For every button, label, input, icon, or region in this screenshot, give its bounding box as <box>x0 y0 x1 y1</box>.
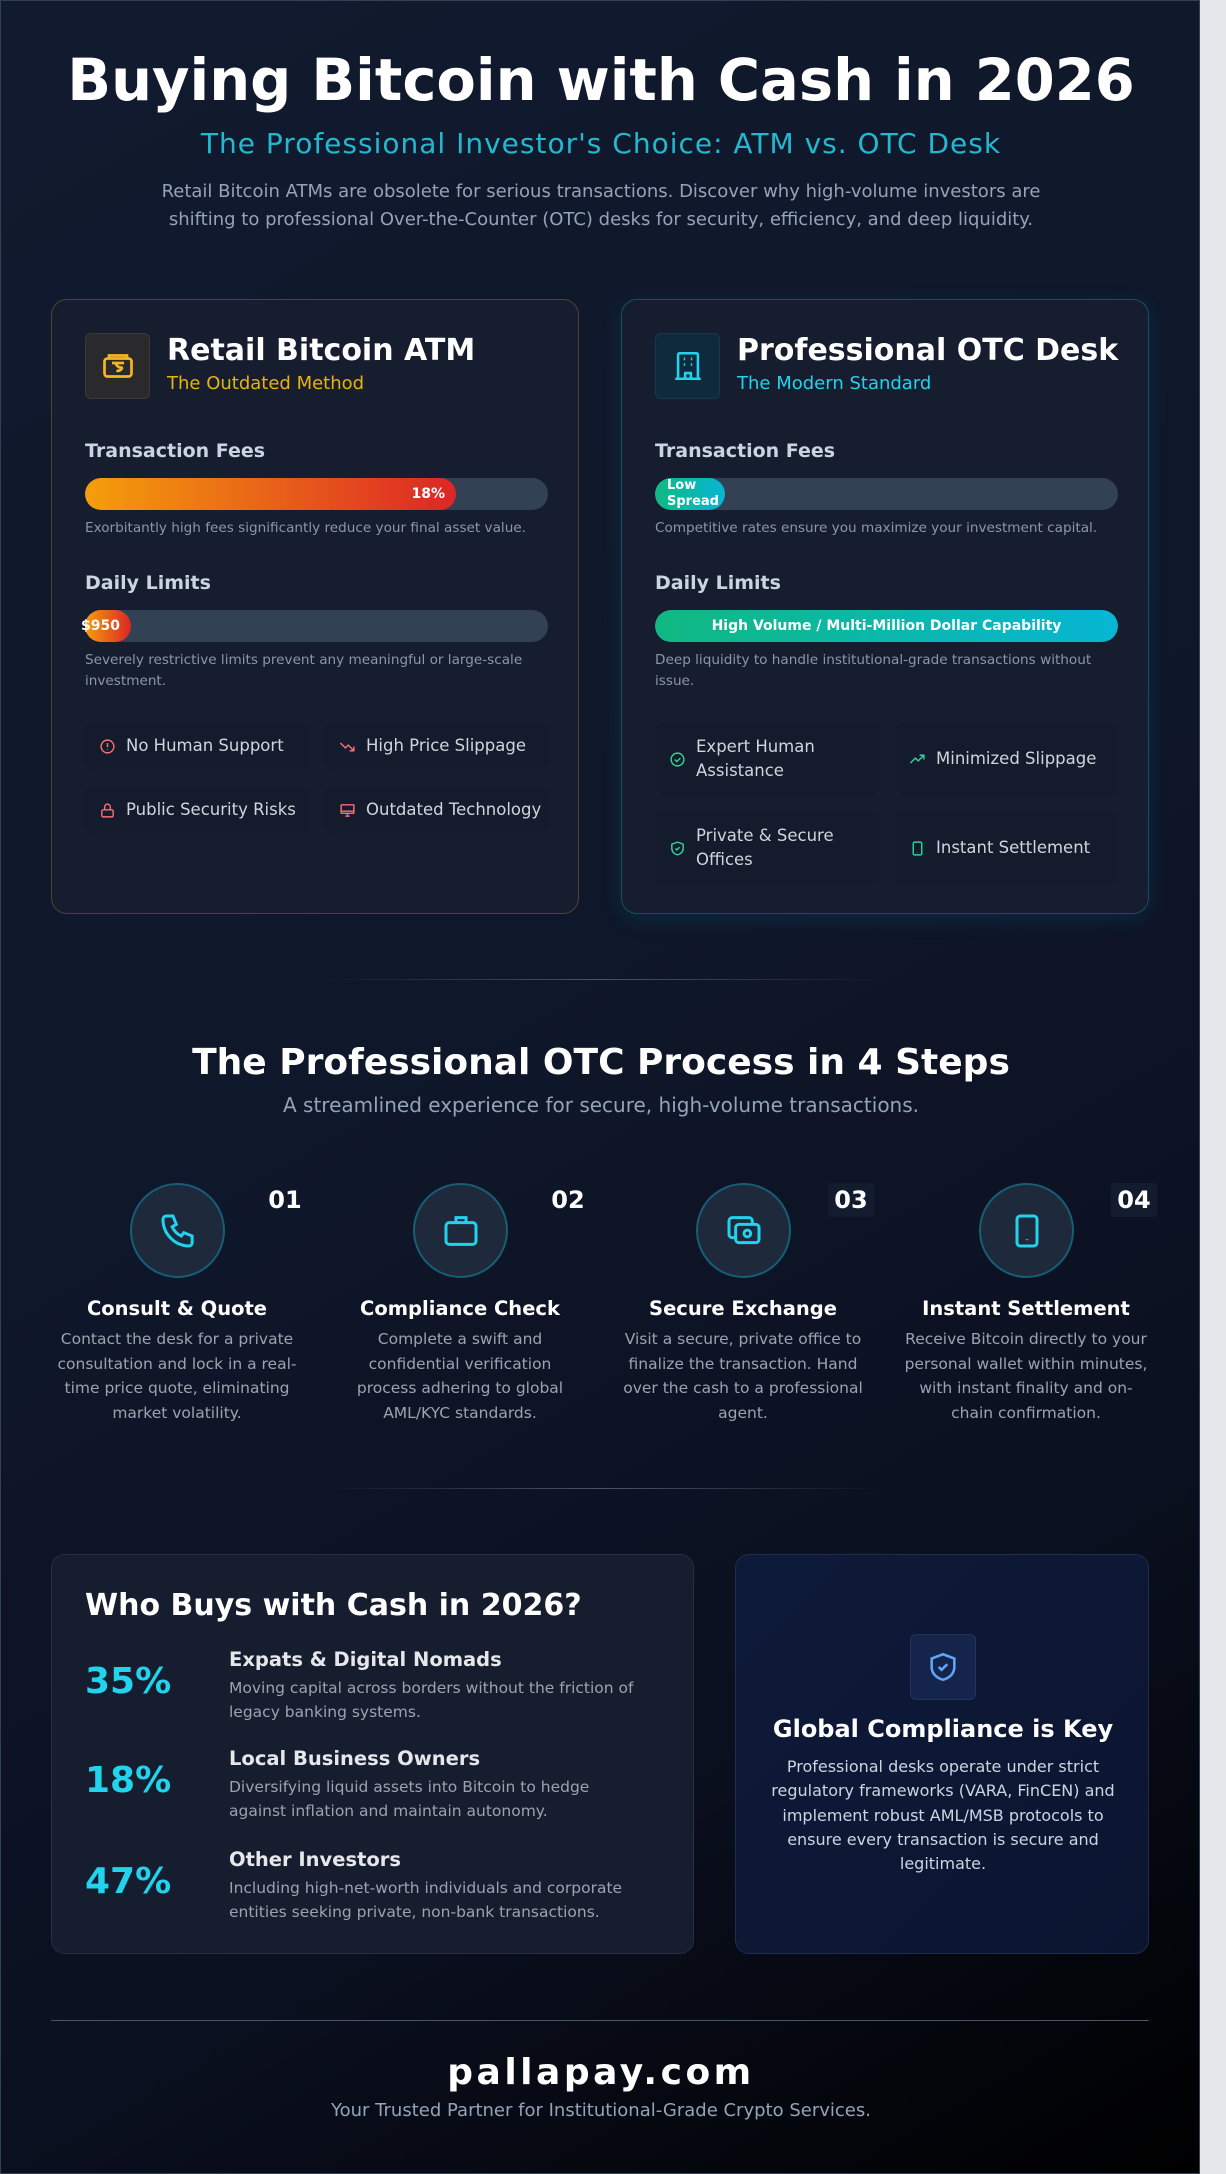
heading: Who Buys with Cash in 2026? <box>85 1588 582 1623</box>
text: Consult & Quote <box>87 1297 267 1320</box>
feature: settlement <box>895 812 1118 884</box>
step 3 <box>623 1183 874 1422</box>
heading: Retail Bitcoin ATM <box>167 333 475 368</box>
heading: Professional OTC Desk <box>737 333 1118 368</box>
feature: slippage: Minimized Slippage <box>936 749 1096 768</box>
feature: no human support: No Human Support <box>126 736 284 755</box>
stat: expats: Expats & Digital Nomads <box>229 1648 502 1671</box>
bar: limits $950: $950 <box>81 618 120 634</box>
text: 01 <box>268 1186 302 1214</box>
icon: shield <box>910 1634 976 1700</box>
feature: technology <box>325 787 548 833</box>
bar: low spread: Low <box>667 478 696 493</box>
text: 03 <box>834 1186 868 1214</box>
panel: retail ATM: Exorbitantly high fees significantly reduce your final asset value. <box>85 520 526 536</box>
stat: expats: 35% <box>85 1661 171 1702</box>
feature: private offices: Private & Secure <box>696 826 834 845</box>
text: Visit a secure, private office to finalize the transaction. Hand over the cash to a professional agent. <box>623 1330 863 1422</box>
subtitle: The Professional Investor's Choice: ATM vs. OTC Desk <box>201 127 1001 160</box>
text: Instant Settlement <box>922 1297 1130 1320</box>
feature: private offices: Offices <box>696 850 753 869</box>
feature: expert <box>655 723 880 795</box>
stat: business owners: 18% <box>85 1760 171 1801</box>
feature: slippage <box>325 723 548 769</box>
label: limits: Daily Limits <box>655 572 781 594</box>
icon: cash <box>696 1183 791 1278</box>
label: fees: Transaction Fees <box>655 440 835 462</box>
stat: other investors: Including high-net-worth individuals and corporate entities seeking private, non-bank transactions. <box>229 1879 622 1921</box>
icon: phone <box>130 1183 225 1278</box>
bar: high volume: High Volume / Multi-Million Dollar Capability <box>712 618 1061 634</box>
stat: other investors: 47% <box>85 1861 171 1902</box>
stat: business owners <box>85 1747 589 1820</box>
stat: business owners: Diversifying liquid assets into Bitcoin to hedge against inflation and maintain autonomy. <box>229 1778 589 1820</box>
step 2 <box>357 1183 585 1422</box>
intro text: Retail Bitcoin ATMs are obsolete for serious transactions. Discover why high-volume investors are shifting to professional Over-the-Counter (OTC) desks for security, efficiency, and deep liquidity. <box>162 181 1040 230</box>
panel: retail ATM: Severely restrictive limits prevent any meaningful or large-scale investment. <box>85 652 522 689</box>
icon: building <box>655 333 720 399</box>
text: Complete a swift and confidential verification process adhering to global AML/KYC standards. <box>357 1330 563 1422</box>
panel: retail ATM: The Outdated Method <box>167 373 364 394</box>
feature: security <box>85 787 310 833</box>
label: fees: Transaction Fees <box>85 440 265 462</box>
text: 04 <box>1117 1186 1151 1214</box>
panel: who buys <box>51 1554 694 1954</box>
bar: low spread <box>655 478 1118 510</box>
panel: OTC desk: Deep liquidity to handle institutional-grade transactions without issue. <box>655 652 1091 689</box>
text: Receive Bitcoin directly to your personal wallet within minutes, with instant finality and on-chain confirmation. <box>905 1330 1147 1422</box>
footer brand: pallapay.com <box>447 2052 755 2093</box>
text: Contact the desk for a private consultation and lock in a real-time price quote, eliminating market volatility. <box>58 1330 296 1422</box>
text: Secure Exchange <box>649 1297 837 1320</box>
text: Compliance Check <box>360 1297 560 1320</box>
title: Buying Bitcoin with Cash in 2026 <box>67 47 1135 114</box>
panel: OTC desk: Competitive rates ensure you maximize your investment capital. <box>655 520 1097 536</box>
panel: retail ATM <box>51 299 579 914</box>
icon: mobile <box>979 1183 1074 1278</box>
feature: no human support <box>85 723 310 769</box>
bar: low spread: Spread <box>667 494 719 509</box>
text: Professional desks operate under strict regulatory frameworks (VARA, FinCEN) and implement robust AML/MSB protocols to ensure every transaction is secure and legitimate. <box>771 1757 1115 1873</box>
section subtitle: A streamlined experience for secure, high-volume transactions. <box>283 1093 919 1117</box>
feature: slippage <box>895 723 1118 795</box>
stat: business owners: Local Business Owners <box>229 1747 480 1770</box>
section heading: process: The Professional OTC Process in 4 Steps <box>192 1042 1010 1083</box>
stat: other investors <box>85 1848 622 1921</box>
feature: private offices <box>655 812 880 884</box>
stat: expats <box>85 1648 634 1721</box>
step 4 <box>905 1183 1157 1422</box>
feature: expert: Expert Human <box>696 737 815 756</box>
feature: settlement: Instant Settlement <box>936 838 1090 857</box>
feature: expert: Assistance <box>696 761 784 780</box>
footer tagline: Your Trusted Partner for Institutional-Grade Crypto Services. <box>331 2100 871 2121</box>
feature: security: Public Security Risks <box>126 800 296 819</box>
bar: limits $950 <box>85 610 548 642</box>
panel: OTC desk <box>621 299 1149 914</box>
step 1 <box>58 1183 302 1422</box>
bar: fees 18% <box>85 478 548 510</box>
text: 02 <box>551 1186 585 1214</box>
panel: compliance <box>735 1554 1149 1954</box>
bar: fees 18%: 18% <box>411 486 445 502</box>
bar: high volume <box>655 610 1118 642</box>
feature: slippage: High Price Slippage <box>366 736 526 755</box>
feature: technology: Outdated Technology <box>366 800 541 819</box>
heading: Global Compliance is Key <box>773 1715 1113 1743</box>
label: limits: Daily Limits <box>85 572 211 594</box>
stat: expats: Moving capital across borders without the friction of legacy banking systems. <box>229 1679 633 1721</box>
stat: other investors: Other Investors <box>229 1848 401 1871</box>
icon: wallet <box>85 333 150 399</box>
panel: OTC desk: The Modern Standard <box>737 373 931 394</box>
icon: briefcase <box>413 1183 508 1278</box>
